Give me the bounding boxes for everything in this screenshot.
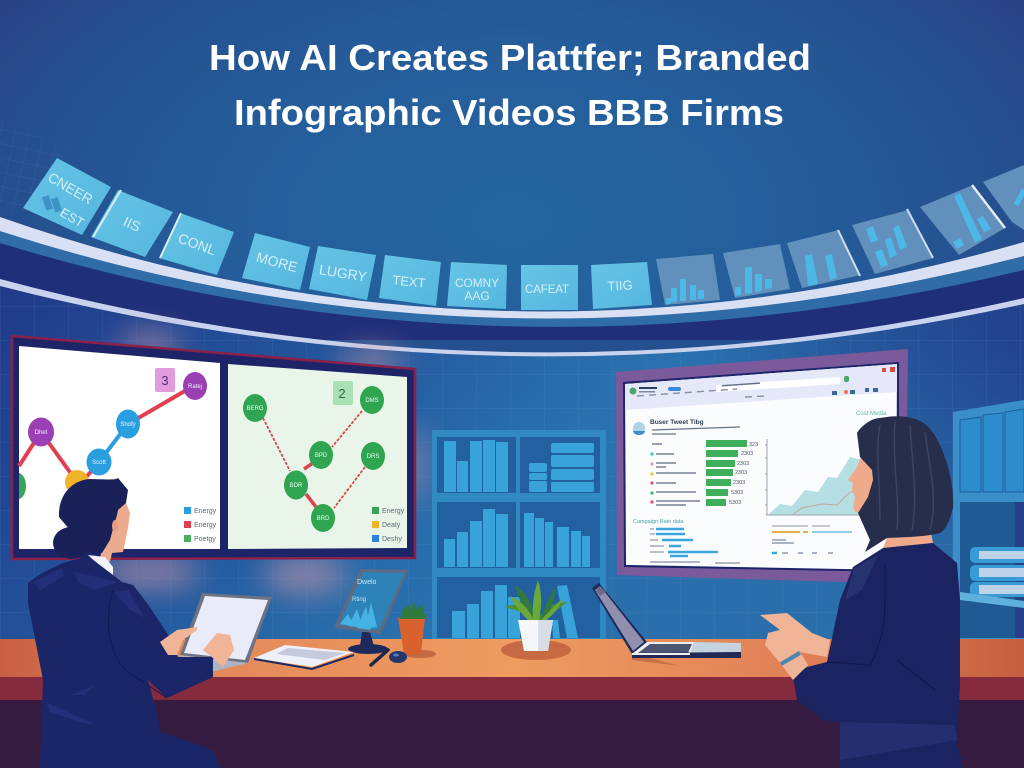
curved navy ceiling band (0, 224, 1024, 340)
top left compartment (437, 437, 516, 493)
tile: MORE (242, 233, 310, 290)
man hair (59, 478, 128, 553)
small plant in orange pot (398, 601, 436, 658)
tile: CAFEAT (521, 265, 578, 310)
tile: CNEER (23, 158, 111, 235)
tile: CAFEAT: CAFEAT (525, 282, 570, 296)
nodes: BERG (246, 406, 264, 412)
woman hands (760, 613, 830, 680)
panel: right wall monitor (616, 349, 908, 584)
connecting lines (19, 388, 190, 482)
tile: COMNY AAG (447, 262, 507, 309)
legend: Energy (382, 508, 405, 515)
tile: bar chart 5 (920, 185, 1005, 255)
monitor on desk: Dwelo (357, 579, 377, 586)
tile: COMNY AAG: AAG (464, 289, 490, 303)
nodes: Dhet (35, 430, 48, 436)
tile: TEXT: TEXT (392, 272, 426, 291)
lower white curved rail (0, 279, 1024, 356)
solid links (304, 463, 316, 507)
nodes (243, 386, 385, 532)
nodes: BDR (290, 483, 303, 489)
tile: TEXT (379, 255, 441, 306)
open laptop on right of desk (592, 583, 741, 666)
legend: Poetgy (194, 536, 216, 543)
green bar chart: 2303 (741, 451, 753, 457)
browser header (625, 364, 897, 410)
desk front (0, 677, 1024, 700)
page heading: Cost Media (856, 411, 887, 417)
woman face and neck (848, 450, 933, 548)
top right compartment (520, 437, 600, 493)
title (209, 37, 811, 133)
jacket highlights (33, 568, 167, 725)
tile: bar chart 3 (787, 230, 861, 288)
monitor frame (616, 349, 908, 584)
right side shelf (953, 400, 1024, 640)
tile: CNEER: EST (58, 205, 87, 230)
desk top (0, 639, 1024, 677)
panel: white network chart (19, 346, 220, 549)
legend (372, 507, 405, 543)
tile: TIIG (591, 262, 652, 309)
tile: bar chart 4 (852, 209, 933, 274)
blue bar list: Campaign Rate data (633, 519, 684, 525)
potted plant on desk (501, 580, 571, 660)
woman hair (857, 416, 953, 552)
badge 2 (333, 381, 353, 405)
nodes: Ratej (188, 384, 202, 390)
carousel of tiles (23, 158, 1024, 310)
nodes: Shofy (120, 422, 136, 428)
monitor content (625, 364, 897, 570)
man neck and face (100, 503, 130, 562)
badge 3: 3 (161, 373, 169, 388)
title: How AI Creates Plattfer; Branded (209, 37, 811, 78)
woman body (793, 543, 963, 768)
tile: LUGRY: LUGRY (318, 261, 369, 285)
middle left compartment (437, 502, 516, 568)
wall with grid (0, 283, 1024, 700)
page heading: Buser Tweet Tibg (650, 419, 704, 426)
legend: Deshy (382, 536, 402, 543)
stacked folders (970, 547, 1024, 597)
tile: TIIG: TIIG (607, 277, 633, 294)
green bar chart: 2303 (735, 470, 747, 476)
man ear (112, 520, 118, 532)
tile: IIS: IIS (121, 213, 143, 235)
hair bun (53, 527, 89, 559)
keyboard (254, 645, 354, 669)
nodes: BPD (315, 453, 328, 459)
screen frame (12, 336, 415, 559)
man legs (150, 730, 220, 768)
light blue band under curve (0, 230, 1024, 327)
nodes: DMS (365, 398, 379, 404)
legend (184, 507, 217, 543)
green bar chart: 2303 (733, 480, 745, 486)
man hands (160, 627, 234, 667)
tile: CNEER: CNEER (45, 169, 96, 207)
pen and mouse (371, 650, 407, 665)
under desk (0, 700, 1024, 768)
tile: MORE: MORE (255, 249, 299, 275)
tile: CONL: CONL (176, 230, 218, 258)
soft pink wall lights (100, 331, 425, 595)
legend: Energy (194, 522, 217, 529)
page heading (633, 411, 887, 435)
tile: CONL (159, 213, 234, 275)
dashed arrows (263, 411, 365, 508)
panel: left wall screen (12, 336, 415, 559)
background: sky dome (0, 0, 1024, 340)
panel: green network chart (228, 364, 407, 549)
wristband (781, 653, 800, 664)
middle right compartment (520, 502, 600, 568)
hair strands (878, 422, 933, 530)
white curved rail (0, 217, 1024, 319)
desk (0, 639, 1024, 768)
badge 3 (155, 368, 175, 392)
bookshelf (432, 430, 606, 642)
badge 2: 2 (338, 386, 346, 401)
blue bar list (633, 519, 740, 563)
man body (28, 556, 213, 768)
nodes (19, 372, 207, 499)
tile: LUGRY (309, 246, 376, 300)
tile: IIS (91, 190, 173, 257)
green bar chart: 5303 (731, 490, 743, 496)
green bar chart (650, 440, 758, 506)
monitor on desk (334, 569, 408, 654)
binders (960, 409, 1024, 492)
man at laptop (28, 478, 234, 768)
tile: bar chart 1 (656, 254, 720, 305)
nodes: Scott (92, 460, 106, 466)
green bar chart: 5303 (729, 500, 741, 506)
monitor on desk: Rting (352, 597, 366, 603)
tile: COMNY AAG: COMNY (455, 276, 499, 290)
nodes: BRD (317, 516, 330, 522)
lower right legend (772, 526, 852, 553)
tile: bar chart 2 (723, 244, 790, 298)
laptop used by man (178, 593, 272, 671)
area chart (765, 439, 862, 515)
legend: Energy (194, 508, 217, 515)
jacket details (827, 555, 957, 760)
shirt collar (88, 555, 113, 575)
bottom compartment (437, 577, 600, 638)
nodes: DRS (367, 454, 379, 460)
title: Infographic Videos BBB Firms (234, 92, 784, 133)
legend: Deaty (382, 522, 401, 529)
green bar chart: 2303 (737, 461, 749, 467)
tile: partial chart (983, 165, 1024, 230)
woman presenting (760, 416, 963, 768)
green bar chart: 323 (749, 442, 758, 448)
